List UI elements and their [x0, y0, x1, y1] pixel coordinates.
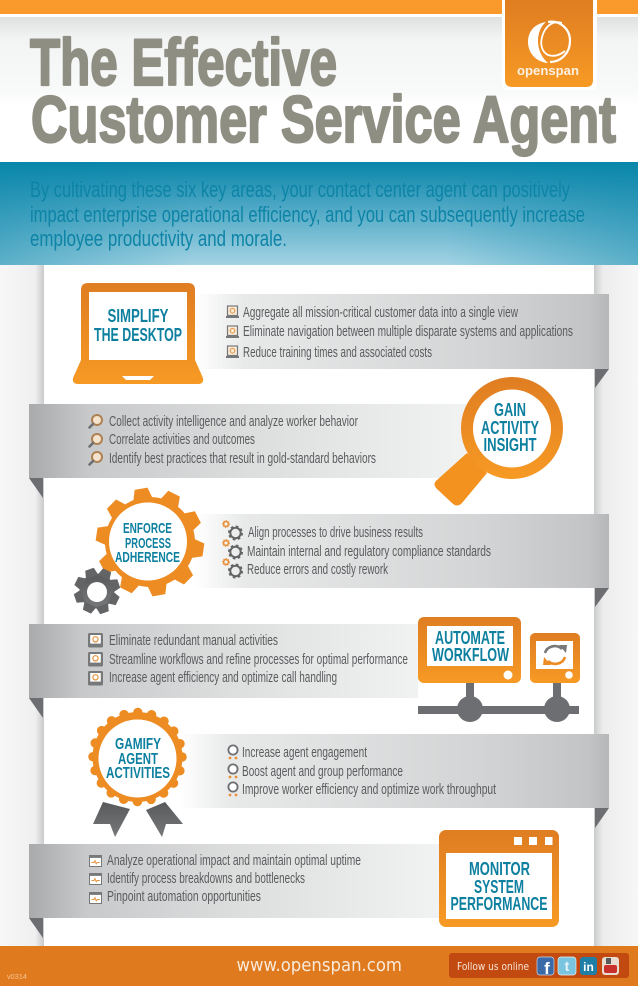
heading: SIMPLIFY: [108, 306, 168, 326]
heading: [115, 520, 180, 566]
logo mark: [528, 22, 570, 63]
title: The Effective: [30, 25, 337, 99]
logo wordmark: openspan: [517, 63, 579, 78]
icon: facebook: [537, 957, 554, 978]
left page margin: [0, 265, 44, 946]
heading: WORKFLOW: [432, 645, 509, 665]
bullet list: Identify best practices that result in gold-standard behaviors: [109, 450, 376, 467]
heading: AUTOMATE: [435, 628, 505, 648]
heading: SYSTEM: [474, 877, 524, 897]
bullet list: Analyze operational impact and maintain optimal uptime: [107, 852, 361, 869]
intro text: [30, 177, 585, 251]
heading: THE DESKTOP: [94, 325, 182, 345]
top orange bar: [0, 0, 638, 14]
panel: monitor system performance: [29, 830, 559, 938]
footer: [0, 946, 638, 986]
bullet list: Align processes to drive business results: [248, 524, 423, 541]
bullet list: Eliminate redundant manual activities: [109, 632, 278, 649]
logo tab: [502, 0, 597, 90]
title: [30, 25, 616, 156]
panel: enforce process adherence: [73, 487, 609, 615]
heading: ACTIVITIES: [106, 765, 170, 782]
bullet list: Increase agent engagement: [242, 744, 368, 761]
white content panel: [44, 265, 594, 946]
heading: PERFORMANCE: [450, 894, 548, 914]
heading: GAIN: [494, 400, 526, 420]
bullet list: Reduce training times and associated costs: [243, 344, 432, 361]
heading: [432, 628, 509, 665]
icon: workflow stand: [418, 683, 579, 722]
bullet list: [88, 632, 408, 686]
icon: small terminal with refresh: [530, 633, 580, 683]
bullet list: Collect activity intelligence and analyze worker behavior: [109, 413, 358, 430]
bullet list: Streamline workflows and refine processes for optimal performance: [109, 651, 408, 668]
bullet list: Maintain internal and regulatory compliance standards: [247, 543, 491, 560]
icon: laptop: [73, 283, 203, 384]
heading: [106, 736, 170, 782]
bullet list: Identify process breakdowns and bottlenecks: [107, 870, 305, 887]
bullet list: Improve worker efficiency and optimize work throughput: [242, 781, 497, 798]
heading: ACTIVITY: [481, 418, 539, 438]
icon: youtube: [602, 957, 619, 975]
heading: AGENT: [118, 751, 158, 768]
icon: linkedin: [580, 957, 597, 975]
panel: gamify agent activities: [92, 712, 609, 837]
icon: twitter: t: [565, 958, 570, 974]
panel: gain activity insight: [29, 377, 563, 506]
right page margin: [594, 265, 638, 946]
heading: ADHERENCE: [115, 549, 180, 566]
bullet list: [223, 521, 491, 578]
icon: badge ribbons: [93, 802, 183, 837]
social label: Follow us online: [457, 960, 529, 973]
heading: ENFORCE: [123, 520, 172, 537]
heading: MONITOR: [469, 859, 530, 879]
icon: small dark gear: [73, 567, 121, 615]
intro band: [0, 162, 638, 265]
social box: [449, 953, 629, 978]
icon: badge: [92, 712, 182, 802]
bullet list: [226, 304, 573, 361]
bullet list: Correlate activities and outcomes: [109, 431, 255, 448]
icon: large terminal: [418, 617, 521, 683]
icon: linkedin: in: [583, 960, 594, 974]
heading: PROCESS: [125, 535, 171, 552]
bullet list: Boost agent and group performance: [242, 763, 403, 780]
heading: GAMIFY: [115, 736, 161, 753]
heading: [450, 859, 548, 914]
website url: www.openspan.com: [236, 955, 402, 976]
heading: INSIGHT: [484, 435, 536, 455]
icon: application window: [439, 830, 559, 927]
header background: [0, 17, 638, 107]
version label: v0314: [7, 972, 27, 981]
bullet list: [90, 852, 361, 905]
icon: facebook: f: [544, 959, 550, 978]
panel: simplify the desktop: [73, 283, 609, 388]
intro text: employee productivity and morale.: [30, 226, 287, 251]
panel: automate workflow: [29, 617, 580, 722]
bullet list: Pinpoint automation opportunities: [107, 888, 261, 905]
icon: magnifier: [434, 377, 563, 506]
bullet list: Increase agent efficiency and optimize call handling: [109, 669, 337, 686]
bullet list: [228, 744, 497, 798]
heading: [481, 400, 539, 455]
icon: twitter: [558, 957, 576, 975]
bullet list: Reduce errors and costly rework: [247, 561, 388, 578]
bullet list: [90, 413, 376, 467]
icon: large orange gear: [95, 487, 205, 597]
heading: [94, 306, 182, 345]
